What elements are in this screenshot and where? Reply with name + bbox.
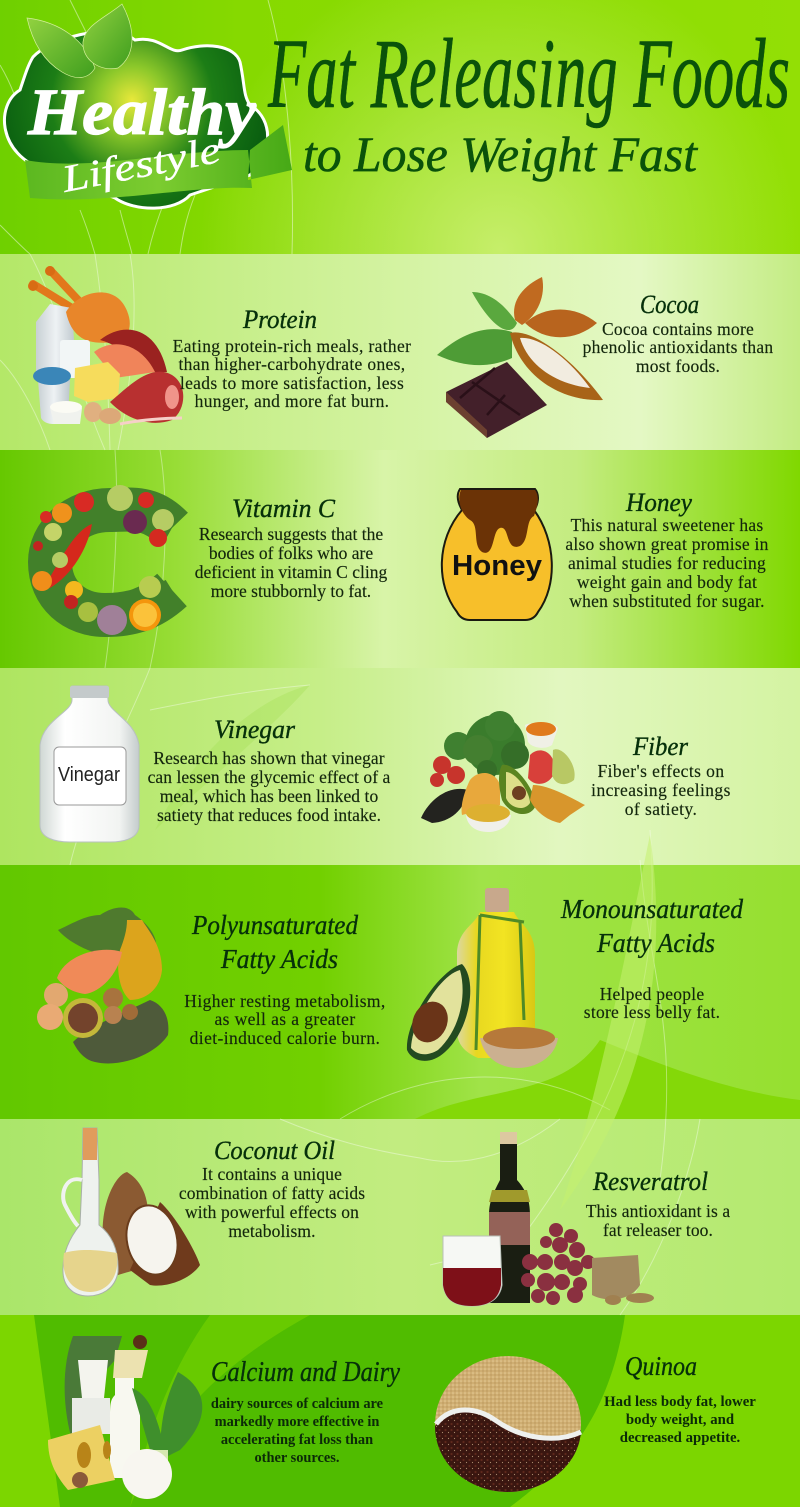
text: quinoa description: body weight, and [626, 1412, 735, 1428]
heading: Fiber: Fiber [632, 732, 689, 761]
text: honey description: also shown great promise in [565, 534, 769, 554]
text: polyunsaturated description: diet-induced calorie burn. [190, 1028, 380, 1048]
heading: Coconut Oil: Coconut Oil [214, 1136, 335, 1165]
text: cocoa description: most foods. [636, 356, 720, 376]
panel: coconut oil [63, 1128, 365, 1296]
heading: Monounsaturated Fatty Acids [560, 894, 743, 958]
logo word Lifestyle: Lifestyle [57, 129, 224, 201]
heading: Cocoa: Cocoa [640, 290, 699, 319]
icon: C of fruits and vegetables [32, 485, 174, 635]
text: vitamin C description: deficient in vitamin C cling [195, 562, 387, 582]
subtitle: to Lose Weight Fast [303, 126, 698, 182]
text: vinegar description: can lessen the glycemic effect of a [148, 767, 391, 787]
text: polyunsaturated description: as well as a greater [214, 1009, 356, 1029]
panel: protein [28, 266, 411, 424]
heading: Honey: Honey [625, 488, 692, 517]
text: protein description: hunger, and more fat burn. [195, 391, 389, 411]
heading: Monounsaturated Fatty Acids: Fatty Acids [596, 928, 715, 958]
text: vinegar description: satiety that reduces food intake. [157, 805, 381, 825]
logo word Healthy: Healthy [27, 76, 257, 149]
text: cocoa description: phenolic antioxidants than [583, 337, 773, 357]
text: honey description: weight gain and body fat [577, 572, 757, 592]
text: fiber description: of satiety. [625, 799, 697, 819]
logo: Healthy Lifestyle [4, 4, 292, 208]
panel: honey [442, 488, 769, 620]
text: coconut oil description: metabolism. [228, 1221, 316, 1241]
text: vinegar description: Research has shown that vinegar [153, 748, 385, 768]
icon: fish, eggs, nuts and oil [37, 908, 168, 1063]
text: resveratrol description: This antioxidant is a [586, 1201, 730, 1221]
text: quinoa description: Had less body fat, lower [604, 1394, 756, 1410]
text: honey description: animal studies for reducing [568, 553, 766, 573]
heading: Quinoa: Quinoa [625, 1351, 697, 1381]
text: vitamin C description: more stubbornly to fat. [211, 581, 371, 601]
icon: fiber foods [421, 711, 585, 832]
panel: resveratrol [443, 1132, 730, 1306]
text: coconut oil description: with powerful effects on [185, 1202, 359, 1222]
logo badge [4, 32, 268, 208]
background header band [0, 0, 800, 254]
panel: polyunsaturated fatty acids [37, 908, 386, 1063]
text: vitamin C description: bodies of folks who are [209, 543, 373, 563]
heading: Calcium and Dairy: Calcium and Dairy [211, 1357, 400, 1388]
icon: vinegar bottle [40, 686, 139, 842]
text: calcium description: dairy sources of calcium are [211, 1396, 384, 1412]
icon: left leaf [27, 18, 95, 78]
icon: right leaf [83, 4, 132, 69]
bottle label: Vinegar [58, 764, 120, 786]
heading: Polyunsaturated Fatty Acids [191, 910, 358, 974]
decorative curves across rows [0, 254, 700, 1315]
panel background: row 4 [0, 865, 800, 1119]
text: monounsaturated description: store less belly fat. [584, 1002, 720, 1022]
text: calcium description: accelerating fat loss than [221, 1432, 373, 1448]
text: calcium description: other sources. [254, 1450, 340, 1466]
decorative leaf sweep row 3 [155, 685, 310, 830]
text: polyunsaturated description: Higher resting metabolism, [184, 991, 386, 1011]
heading: Vinegar: Vinegar [214, 715, 296, 744]
text: vinegar description: meal, which has been linked to [160, 786, 378, 806]
panel background: row 5 [0, 1119, 800, 1315]
text: coconut oil description: It contains a unique [202, 1164, 342, 1184]
panel background: row 3 [0, 668, 800, 865]
heading: Polyunsaturated Fatty Acids: Fatty Acids [220, 944, 338, 974]
heading: Vitamin C: Vitamin C [232, 494, 336, 523]
icon: quinoa bowl [435, 1356, 581, 1492]
text: monounsaturated description: Helped people [600, 984, 704, 1004]
icon: protein foods [28, 266, 183, 424]
text: fiber description: Fiber's effects on [597, 761, 725, 781]
panel: vinegar [40, 686, 391, 842]
text: quinoa description: decreased appetite. [620, 1430, 741, 1446]
icon: honey jar [442, 489, 552, 620]
panel: quinoa [435, 1351, 756, 1492]
text: protein description: than higher-carbohydrate ones, [178, 354, 406, 374]
panel background: row 2 [0, 450, 800, 668]
icon: olive oil, avocado, almonds [406, 888, 558, 1068]
text: cocoa description: Cocoa contains more [602, 319, 754, 339]
icon: cocoa pod and chocolate [437, 277, 603, 438]
icon: wine, grapes and nuts [443, 1132, 654, 1306]
panel background: row 6 [0, 1315, 800, 1507]
text: calcium description: markedly more effective in [215, 1414, 379, 1430]
heading: Resveratrol: Resveratrol [592, 1167, 708, 1196]
panel: calcium and dairy [48, 1335, 400, 1499]
text: protein description: Eating protein-rich meals, rather [173, 336, 411, 356]
panel: vitamin C [32, 485, 387, 635]
text: resveratrol description: fat releaser too. [603, 1220, 713, 1240]
heading: Polyunsaturated Fatty Acids: Polyunsaturated [191, 910, 358, 940]
text: honey description: when substituted for sugar. [569, 591, 765, 611]
heading: Protein: Protein [242, 305, 317, 334]
text: fiber description: increasing feelings [591, 780, 731, 800]
text: protein description: leads to more satisfaction, less [180, 373, 404, 393]
text: coconut oil description: combination of fatty acids [179, 1183, 365, 1203]
text: honey description: This natural sweetener has [571, 515, 763, 535]
panel background: row 1 [0, 254, 800, 450]
panel: monounsaturated fatty acids [406, 888, 743, 1068]
text: vitamin C description: Research suggests that the [199, 524, 383, 544]
panel: cocoa [437, 277, 773, 438]
panel: fiber [421, 711, 731, 832]
icon: dairy foods and greens [48, 1335, 202, 1499]
jar label: Honey [452, 550, 542, 582]
icon: oil bottle and coconut [63, 1128, 200, 1296]
decorative leaf sweep [560, 835, 656, 1210]
heading: Monounsaturated Fatty Acids: Monounsaturated [560, 894, 743, 924]
ribbon [25, 125, 292, 199]
